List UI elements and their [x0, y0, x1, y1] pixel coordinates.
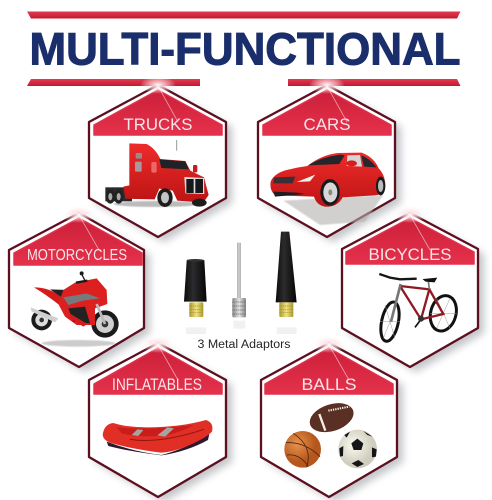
- caption: 3 metal adaptors: 3 Metal Adaptors: [198, 339, 291, 351]
- icon: basketball: [284, 431, 321, 468]
- title: MULTI-FUNCTIONAL: [30, 24, 460, 74]
- icon: soccer ball: [338, 430, 377, 468]
- icon: red semi truck: [105, 140, 209, 207]
- heading: trucks: TRUCKS: [124, 116, 192, 134]
- heading: cars: CARS: [304, 116, 350, 134]
- panel: inflatables: [89, 335, 232, 500]
- panel: adaptors: [184, 232, 297, 351]
- icon: red sedan car: [270, 153, 385, 225]
- panel: trucks: [89, 76, 232, 242]
- heading: motorcycles: MOTORCYCLES: [27, 247, 127, 264]
- icon: left black adaptor: [184, 259, 207, 334]
- icon: sports balls: [284, 398, 377, 468]
- icon: football: [306, 398, 357, 437]
- panel: balls: [261, 335, 403, 500]
- lower red bar right: [288, 79, 460, 86]
- panel: bicycles: [342, 205, 484, 372]
- heading: inflatables: INFLATABLES: [112, 376, 202, 394]
- panel: cars: [258, 76, 401, 242]
- top red bar: [27, 12, 460, 18]
- icon: red inflatable raft: [103, 420, 212, 455]
- icon: bicycle: [378, 274, 460, 343]
- lower red bar left: [27, 79, 200, 86]
- panel: motorcycles: [9, 205, 150, 372]
- icon: middle needle adaptor: [232, 243, 246, 329]
- heading: balls: BALLS: [302, 376, 356, 394]
- heading: bicycles: BICYCLES: [368, 246, 452, 264]
- icon: right black adaptor: [276, 232, 297, 334]
- icon: red motorcycle: [31, 271, 119, 347]
